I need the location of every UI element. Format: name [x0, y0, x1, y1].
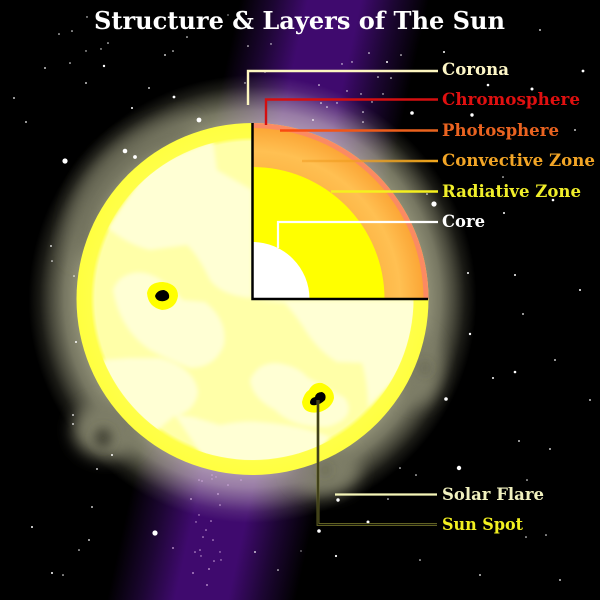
sun surface with outer ring: [76, 123, 428, 475]
label: sun spot: [318, 400, 523, 534]
label: convective zone: Convective Zone: [442, 151, 595, 170]
label: core: [278, 212, 485, 248]
label: sun spot: Sun Spot: [442, 515, 523, 534]
sun spot right: [302, 383, 334, 413]
chromosphere layer: [254, 123, 428, 299]
core layer: [254, 242, 310, 298]
flare centres: [94, 360, 431, 476]
sun: disc: [76, 123, 428, 475]
label: corona: [248, 60, 509, 105]
title: Structure & Layers of The Sun: [94, 6, 505, 35]
label: core: Core: [442, 212, 485, 231]
label: chromosphere: [266, 90, 580, 125]
surface granulation patches: [102, 142, 414, 460]
label: photosphere: Photosphere: [442, 121, 559, 140]
corona glow: [28, 75, 476, 523]
cutaway border: [252, 123, 428, 299]
convective zone layer: [254, 128, 424, 298]
cutaway layers quadrant: [251, 123, 428, 300]
solar flares: [73, 332, 440, 494]
label: corona: Corona: [442, 60, 509, 79]
label: radiative zone: Radiative Zone: [442, 182, 581, 201]
radiative zone layer: [254, 167, 384, 298]
stars in nebula: [172, 474, 242, 586]
label: chromosphere: Chromosphere: [442, 90, 580, 109]
sun spot left: [147, 282, 178, 310]
label: solar flare: Solar Flare: [442, 485, 544, 504]
